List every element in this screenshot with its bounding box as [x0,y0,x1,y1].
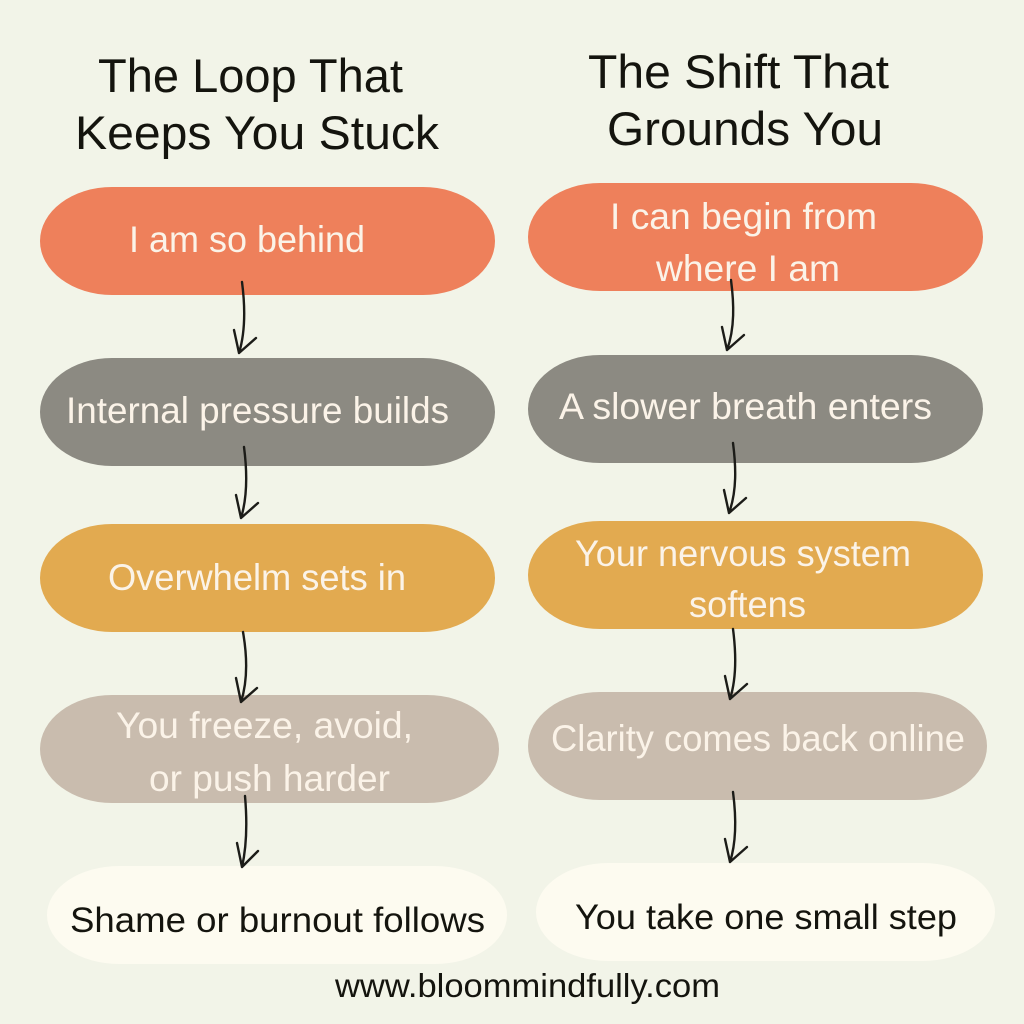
step: You freeze, avoid, or push harder: or push harder [149,758,390,799]
panel: left column steps [40,187,507,964]
footer: website: www.bloommindfully.com [334,967,720,1004]
arrow: right 3 [725,629,747,699]
heading: right column: The Shift That [588,45,889,98]
step: You freeze, avoid, or push harder [40,695,499,803]
step: I can begin from where I am [528,183,983,291]
step: A slower breath enters [528,355,983,463]
step: A slower breath enters: A slower breath enters [559,386,932,427]
step: You take one small step: You take one small step [575,898,957,937]
heading: left column: The Loop That [98,49,403,102]
heading: right column: Grounds You [607,102,883,155]
heading: right column [588,45,889,155]
step: You freeze, avoid, or push harder: You freeze, avoid, [116,705,413,746]
step: Internal pressure builds [40,358,495,466]
arrow: right 4 [725,792,747,862]
heading: left column [75,49,439,159]
step: I can begin from where I am: where I am [655,248,840,289]
panel: right column steps [528,183,995,961]
step: Overwhelm sets in [40,524,495,632]
step: I can begin from where I am: I can begin from [610,196,877,237]
arrow: right 1 [722,280,744,350]
step: Clarity comes back online [528,692,987,800]
step: Shame or burnout follows [47,866,507,964]
arrow: left 4 [237,796,258,867]
step: I am so behind [40,187,495,295]
step: You take one small step [536,863,995,961]
step: Clarity comes back online: Clarity comes back online [551,718,965,759]
arrow: left 2 [236,447,258,518]
arrow: left 1 [234,282,256,353]
step: Internal pressure builds: Internal pressure builds [66,390,449,431]
arrow: right 2 [724,443,746,513]
step: Your nervous system softens: softens [689,584,806,625]
step: Your nervous system softens [528,521,983,629]
step: Your nervous system softens: Your nervous system [575,533,911,574]
arrow: left 3 [236,632,257,702]
heading: left column: Keeps You Stuck [75,106,439,159]
step: Shame or burnout follows: Shame or burnout follows [70,901,485,940]
step: Overwhelm sets in: Overwhelm sets in [108,557,406,598]
step: I am so behind: I am so behind [129,219,365,260]
